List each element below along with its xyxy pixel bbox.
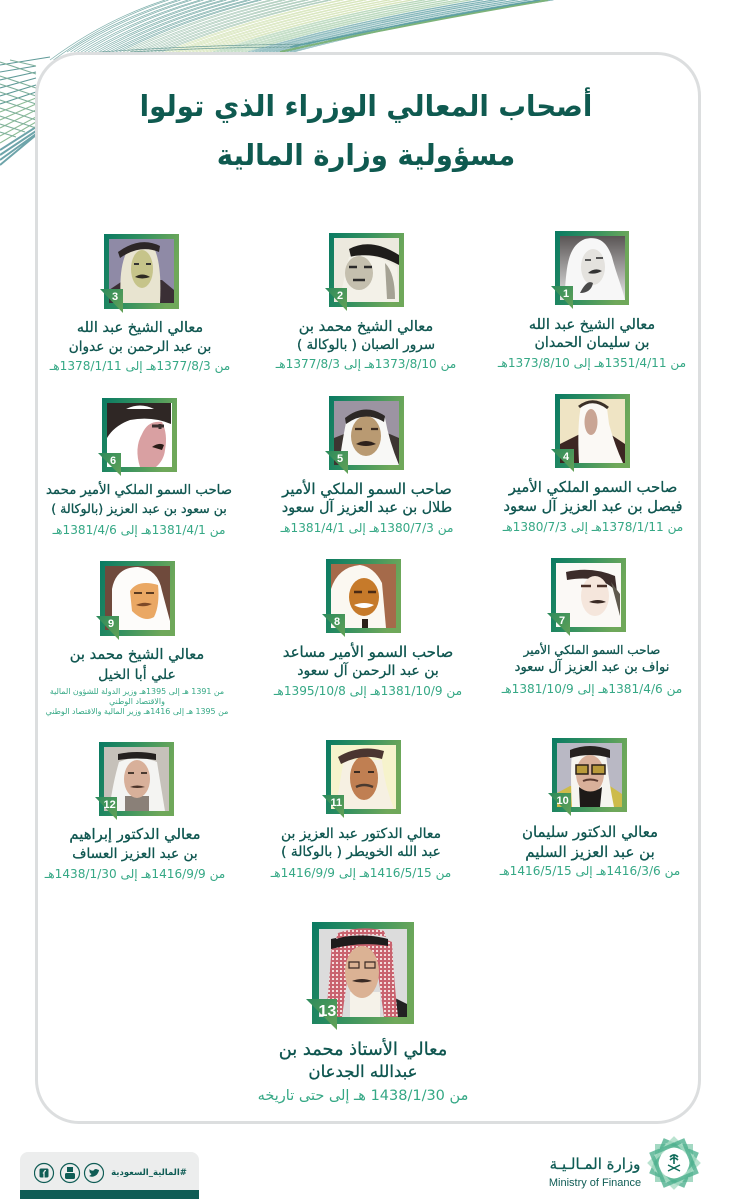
minister 2: سرور الصبان ( بالوكالة ) (297, 337, 435, 353)
minister 9: 9 (108, 618, 114, 630)
minister 4: فيصل بن عبد العزيز آل سعود (503, 498, 683, 515)
minister 2: 2 (337, 290, 343, 302)
minister 5: 5 (337, 453, 343, 465)
minister 9: علي أبا الخيل (98, 667, 176, 683)
minister 2 (276, 233, 456, 372)
minister 7: 7 (559, 615, 565, 627)
minister 11: معالي الدكتور عبد العزيز بن (281, 826, 441, 842)
emblem (647, 1136, 701, 1190)
minister 12: معالي الدكتور إبراهيم (69, 826, 201, 843)
minister 13 (258, 922, 468, 1104)
minister 13: معالي الأستاذ محمد بن (279, 1039, 447, 1060)
minister 3: 3 (112, 291, 118, 303)
minister 10: من 1416/3/6هـ إلى 1416/5/15هـ (500, 864, 680, 878)
logo: ministry of finance (549, 1136, 701, 1190)
minister 8 (274, 559, 462, 698)
minister 2: معالي الشيخ محمد بن (299, 318, 433, 335)
minister 3: من 1377/8/3هـ إلى 1378/1/11هـ (50, 359, 230, 373)
minister 7: نواف بن عبد العزيز آل سعود (515, 660, 669, 675)
minister 5: من 1380/7/3هـ إلى 1381/4/1هـ (281, 521, 453, 535)
minister 10: بن عبد العزيز السليم (525, 843, 655, 861)
minister 11 (270, 740, 451, 880)
minister 11: 11 (330, 797, 342, 809)
minister 4: من 1378/1/11هـ إلى 1380/7/3هـ (503, 520, 683, 534)
minister 12 (44, 742, 225, 882)
minister 4 (502, 394, 683, 534)
minister 8: بن عبد الرحمن آل سعود (297, 663, 439, 679)
minister 8: صاحب السمو الأمير مساعد (283, 643, 453, 661)
minister 8: 8 (334, 616, 340, 628)
minister 7 (502, 558, 682, 696)
minister 6: من 1381/4/1هـ إلى 1381/4/6هـ (53, 523, 225, 537)
minister 8: من 1381/10/9هـ إلى 1395/10/8هـ (274, 684, 462, 698)
minister 2: من 1373/8/10هـ إلى 1377/8/3هـ (276, 357, 456, 371)
minister 10: 10 (556, 795, 569, 807)
minister 1: معالي الشيخ عبد الله (529, 317, 655, 333)
minister 9: والاقتصاد الوطني (109, 697, 165, 706)
title (140, 87, 592, 172)
minister 12: من 1416/9/9هـ إلى 1438/1/30هـ (45, 867, 225, 881)
minister 11: من 1416/5/15هـ إلى 1416/9/9هـ (271, 866, 451, 880)
minister 9: معالي الشيخ محمد بن (70, 646, 204, 663)
minister 10 (500, 738, 680, 878)
minister 6: 6 (110, 455, 116, 467)
minister 11: عبد الله الخويطر ( بالوكالة ) (281, 844, 441, 860)
minister 10: معالي الدكتور سليمان (522, 823, 658, 841)
minister 9 (46, 561, 228, 716)
minister 13: من 1438/1/30 هـ إلى حتى تاريخه (258, 1088, 468, 1104)
minister 5: صاحب السمو الملكي الأمير (282, 480, 452, 498)
minister 9: من 1391 هـ إلى 1395هـ وزير الدولة للشؤون المالية (50, 687, 224, 696)
minister 5: طلال بن عبد العزيز آل سعود (282, 500, 452, 516)
minister 4: 4 (563, 451, 570, 463)
minister 1: 1 (563, 288, 569, 300)
minister 13: 13 (318, 1003, 336, 1020)
minister 7: من 1381/4/6هـ إلى 1381/10/9هـ (502, 682, 682, 696)
minister 6: بن سعود بن عبد العزيز (بالوكالة ) (51, 501, 227, 516)
title: أصحاب المعالي الوزراء الذي تولوا (140, 89, 592, 123)
minister 1: بن سليمان الحمدان (534, 335, 650, 351)
minister 3 (50, 234, 230, 374)
logo text english: Ministry of Finance (549, 1177, 641, 1189)
hashtag: #المالية_السعودية (111, 1168, 187, 1178)
minister 4: صاحب السمو الملكي الأمير (509, 479, 677, 496)
social icons (34, 1162, 104, 1184)
minister 7: صاحب السمو الملكي الأمير (524, 643, 660, 657)
decorative wave lines (0, 0, 554, 166)
minister 6 (46, 398, 232, 538)
minister 1: من 1351/4/11هـ إلى 1373/8/10هـ (498, 356, 686, 370)
minister 9: من 1395 هـ إلى 1416هـ وزير المالية والاقتصاد الوطني (46, 707, 228, 716)
minister 3: معالي الشيخ عبد الله (77, 320, 203, 336)
minister 1 (498, 231, 686, 370)
title: مسؤولية وزارة المالية (217, 138, 515, 172)
minister 5 (280, 396, 453, 536)
minister 6: صاحب السمو الملكي الأمير محمد (46, 483, 232, 498)
minister 13: عبدالله الجدعان (308, 1062, 418, 1081)
logo text arabic: وزارة المـالـيـة (550, 1155, 640, 1173)
footer: social box (20, 1152, 199, 1199)
footer band (20, 1190, 199, 1199)
minister 12: بن عبد العزيز العساف (72, 846, 198, 862)
minister 12: 12 (104, 799, 116, 811)
minister 3: بن عبد الرحمن بن عدوان (69, 339, 211, 355)
